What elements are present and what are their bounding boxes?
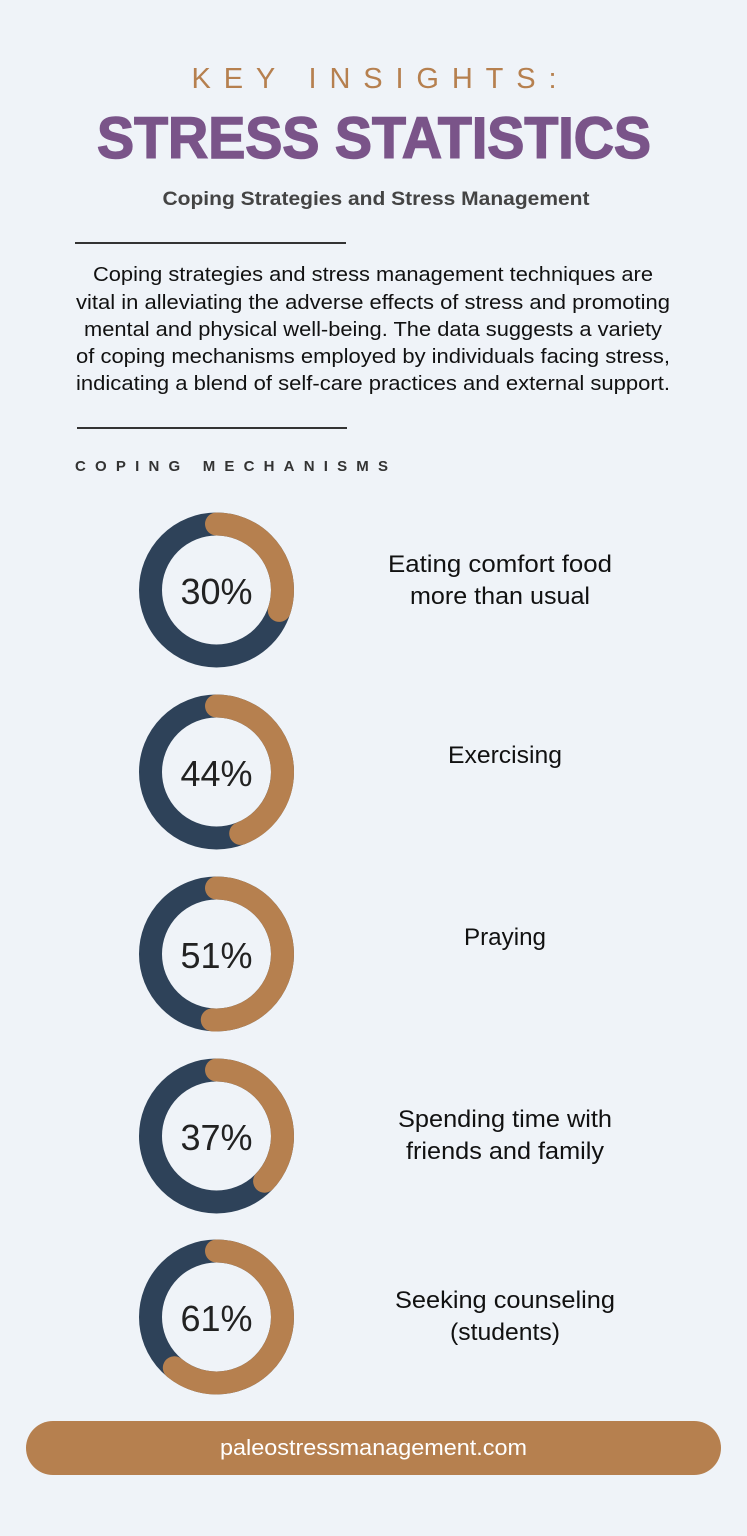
donut: 51% [150, 888, 282, 1020]
label: friends and family: friends and family [406, 1138, 604, 1165]
intro paragraph [76, 264, 670, 395]
donut: 30% [150, 524, 282, 656]
donut: 30%: 30% [180, 571, 253, 612]
label: friends and family: Spending time with [398, 1106, 612, 1133]
label: comfort food: more than usual [410, 583, 590, 610]
intro paragraph: indicating a blend of self-care practices and external support. [76, 373, 670, 395]
intro paragraph: mental and physical well-being. The data suggests a variety [84, 319, 662, 341]
subtitle: Coping Strategies and Stress Management [162, 189, 590, 210]
label: counseling: Seeking counseling [395, 1287, 615, 1314]
intro paragraph: vital in alleviating the adverse effects of stress and promoting [76, 292, 670, 314]
label: comfort food [388, 551, 612, 610]
donut: 51%: 51% [180, 935, 253, 976]
label: exercising: Exercising [448, 742, 562, 769]
label: counseling [395, 1287, 615, 1346]
intro paragraph: of coping mechanisms employed by individuals facing stress, [76, 346, 670, 368]
label: friends and family [398, 1106, 612, 1165]
title: STRESS STATISTICS [97, 106, 651, 171]
donut: 61% [150, 1251, 282, 1383]
intro paragraph: Coping strategies and stress management techniques are [93, 264, 653, 286]
label: counseling: (students) [450, 1319, 560, 1346]
section heading: COPING MECHANISMS [75, 458, 388, 475]
donut: 44%: 44% [180, 753, 253, 794]
heading: key insights: KEY INSIGHTS: [192, 63, 556, 95]
label: praying: Praying [464, 924, 546, 951]
donut: 37% [150, 1070, 282, 1202]
donut: 44% [150, 706, 282, 838]
label: comfort food: Eating comfort food [388, 551, 612, 578]
donut: 61%: 61% [180, 1298, 253, 1339]
footer: paleostressmanagement.com [220, 1435, 527, 1460]
footer [26, 1421, 721, 1475]
donut: 37%: 37% [180, 1117, 253, 1158]
